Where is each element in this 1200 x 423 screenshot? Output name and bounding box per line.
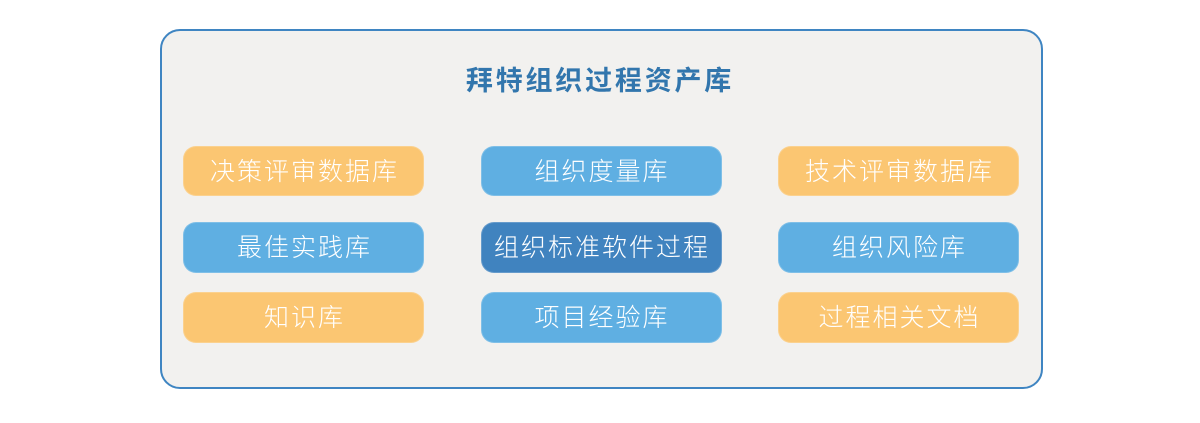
box: organization risk library: 组织风险库 <box>832 234 967 262</box>
box: organization standard software process: 组织标准软件过程 <box>494 234 710 262</box>
box: technical review database: 技术评审数据库 <box>805 158 994 186</box>
panel: process asset library <box>160 29 1043 389</box>
title: 拜特组织过程资产库 <box>466 66 734 96</box>
box: best practices library <box>183 222 424 273</box>
box: process related documents: 过程相关文档 <box>818 304 980 332</box>
box: decision review database <box>183 146 424 196</box>
box: project experience library: 项目经验库 <box>534 304 670 332</box>
box: organization metrics library: 组织度量库 <box>534 158 670 186</box>
box: organization metrics library <box>480 146 722 196</box>
box: organization risk library <box>778 222 1019 273</box>
box: process related documents <box>778 292 1019 343</box>
box: best practices library: 最佳实践库 <box>237 234 372 262</box>
box: technical review database <box>778 146 1019 196</box>
box: project experience library <box>480 292 722 343</box>
box: decision review database: 决策评审数据库 <box>210 158 399 186</box>
box: organization standard software process <box>480 222 722 273</box>
box: knowledge library: 知识库 <box>264 304 345 332</box>
box: knowledge library <box>183 292 424 343</box>
